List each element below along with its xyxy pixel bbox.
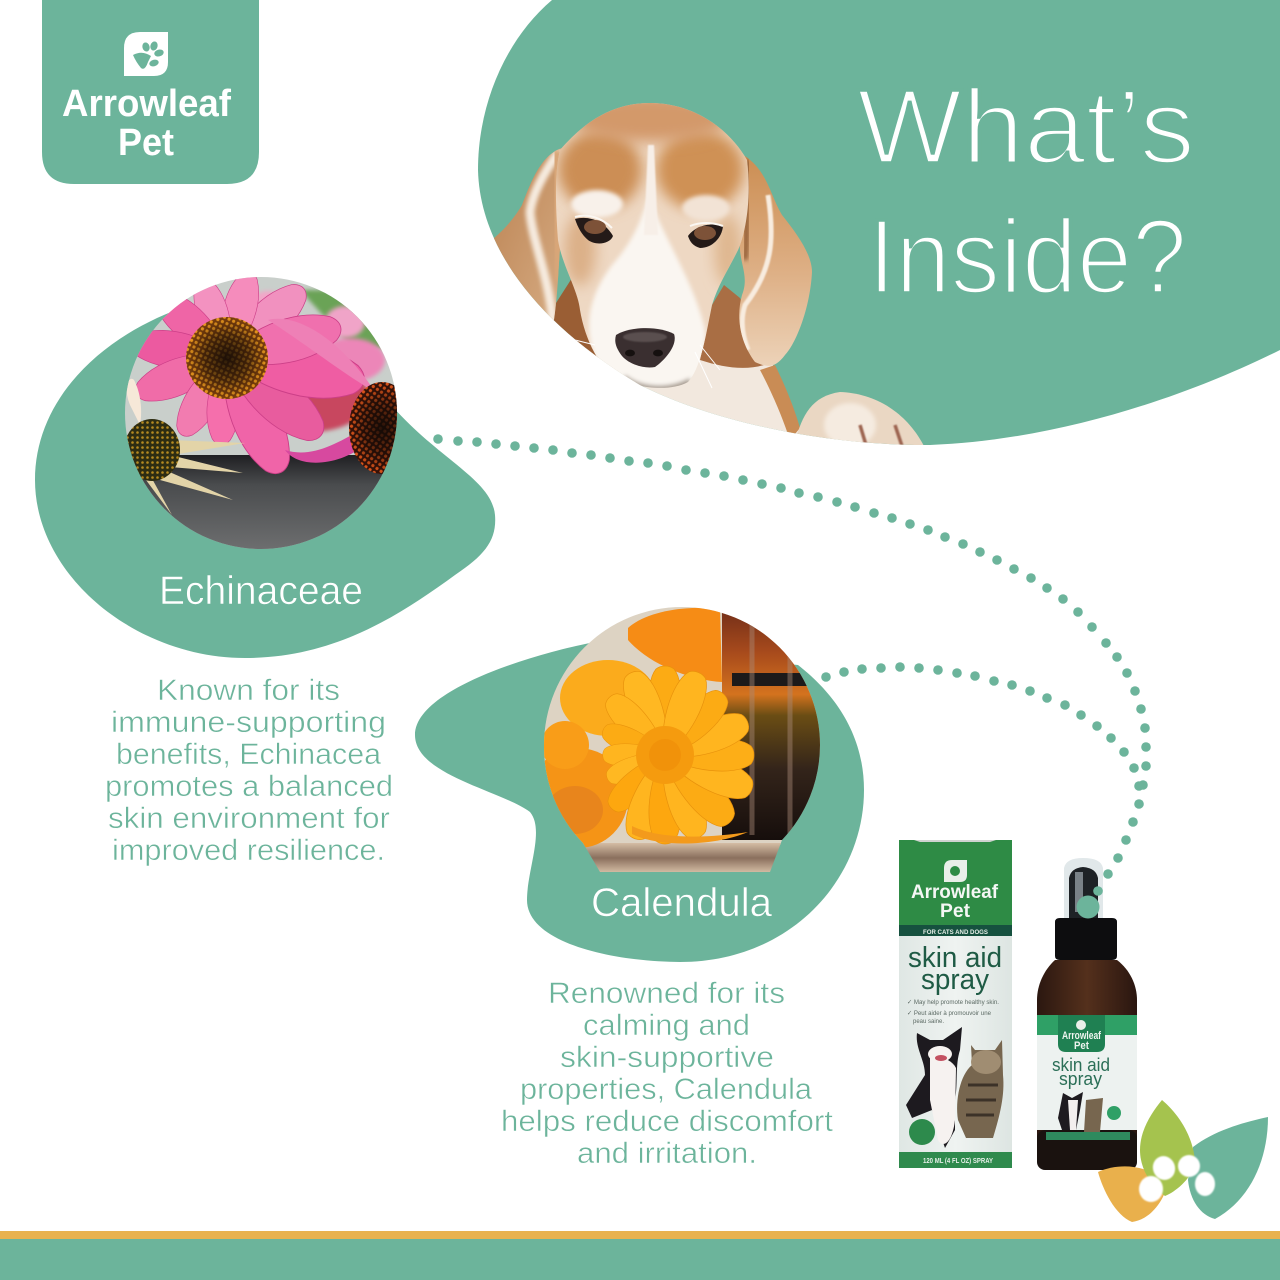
paw toes [1139,1153,1215,1202]
bottle label: Arrowleaf [1062,1030,1101,1042]
logo wordmark: Pet [118,122,174,164]
product box: FOR CATS AND DOGS [923,929,989,936]
left cone and petals [124,379,245,515]
dotted line: echinacea to bottle [433,434,1151,918]
dog left ear [494,148,562,320]
box product name [908,942,1002,996]
bottom green band [0,1239,1280,1280]
logo wordmark [62,83,231,164]
bottle label: spray [1059,1069,1102,1089]
box product name: spray [921,964,989,996]
box product name: skin aid [908,942,1002,974]
logo badge [42,0,259,184]
box logo [911,860,999,922]
dog illustration [485,94,925,450]
echinacea photo [125,277,397,549]
panel: echinacea [35,268,495,658]
text: calendula description: calming and [583,1009,750,1042]
bottom gold stripe [0,1231,1280,1239]
box logo: Arrowleaf [911,882,999,903]
box logo: Pet [940,901,971,922]
title: What’s [857,68,1195,186]
dog nose [615,328,675,368]
text: echinacea description: skin environment for [108,802,390,835]
label: Calendula: Calendula [591,881,773,925]
icon: leaf with paw [124,32,168,76]
text: echinacea description: immune-supporting [111,706,386,739]
dotted line: calendula to bottle [821,662,1144,791]
text: echinacea description: improved resilience. [112,834,385,867]
title [857,68,1195,316]
box claims: ✓ Peut aider à promouvoir une [907,1010,991,1017]
bottle label: skin aid [1052,1055,1110,1075]
product bottle [1037,858,1137,1170]
dog paw [795,392,925,448]
back flowers [544,660,650,848]
dog head [550,94,750,395]
text: calendula description: properties, Calendula [520,1073,812,1106]
text: echinacea description: benefits, Echinacea [116,738,381,771]
icon: logo leaves [1098,1100,1268,1222]
text: echinacea description [105,674,393,867]
box claims: ✓ May help promote healthy skin. [907,999,999,1006]
text: calendula description: Renowned for its [548,977,785,1010]
title: Inside? [868,198,1187,316]
right cone [349,382,397,474]
text: echinacea description: promotes a balanced [105,770,393,803]
calendula photo [544,607,820,872]
product box [899,840,1012,1168]
text: calendula description: and irritation. [577,1137,757,1170]
box dog and cat photo [906,1027,1003,1148]
dog eyes [575,216,723,248]
text: calendula description: helps reduce discomfort [501,1105,834,1138]
flower petals [136,277,365,474]
box claims: peau saine. [913,1018,944,1025]
bottle label: Pet [1074,1040,1089,1052]
text: calendula description: skin-supportive [560,1041,774,1074]
logo wordmark: Arrowleaf [62,83,231,125]
product box: 120 ML (4 FL OZ) SPRAY [923,1158,993,1165]
label: Echinaceae: Echinaceae [159,569,363,613]
text: calendula description [501,977,834,1170]
text: echinacea description: Known for its [157,674,340,707]
panel: calendula [415,600,864,962]
yellow flower petals [599,666,758,844]
bottle label [1037,1015,1137,1140]
header blob with dog [478,0,1280,450]
flower cone [186,317,268,399]
dog right ear [739,156,812,366]
box claims [907,999,999,1025]
